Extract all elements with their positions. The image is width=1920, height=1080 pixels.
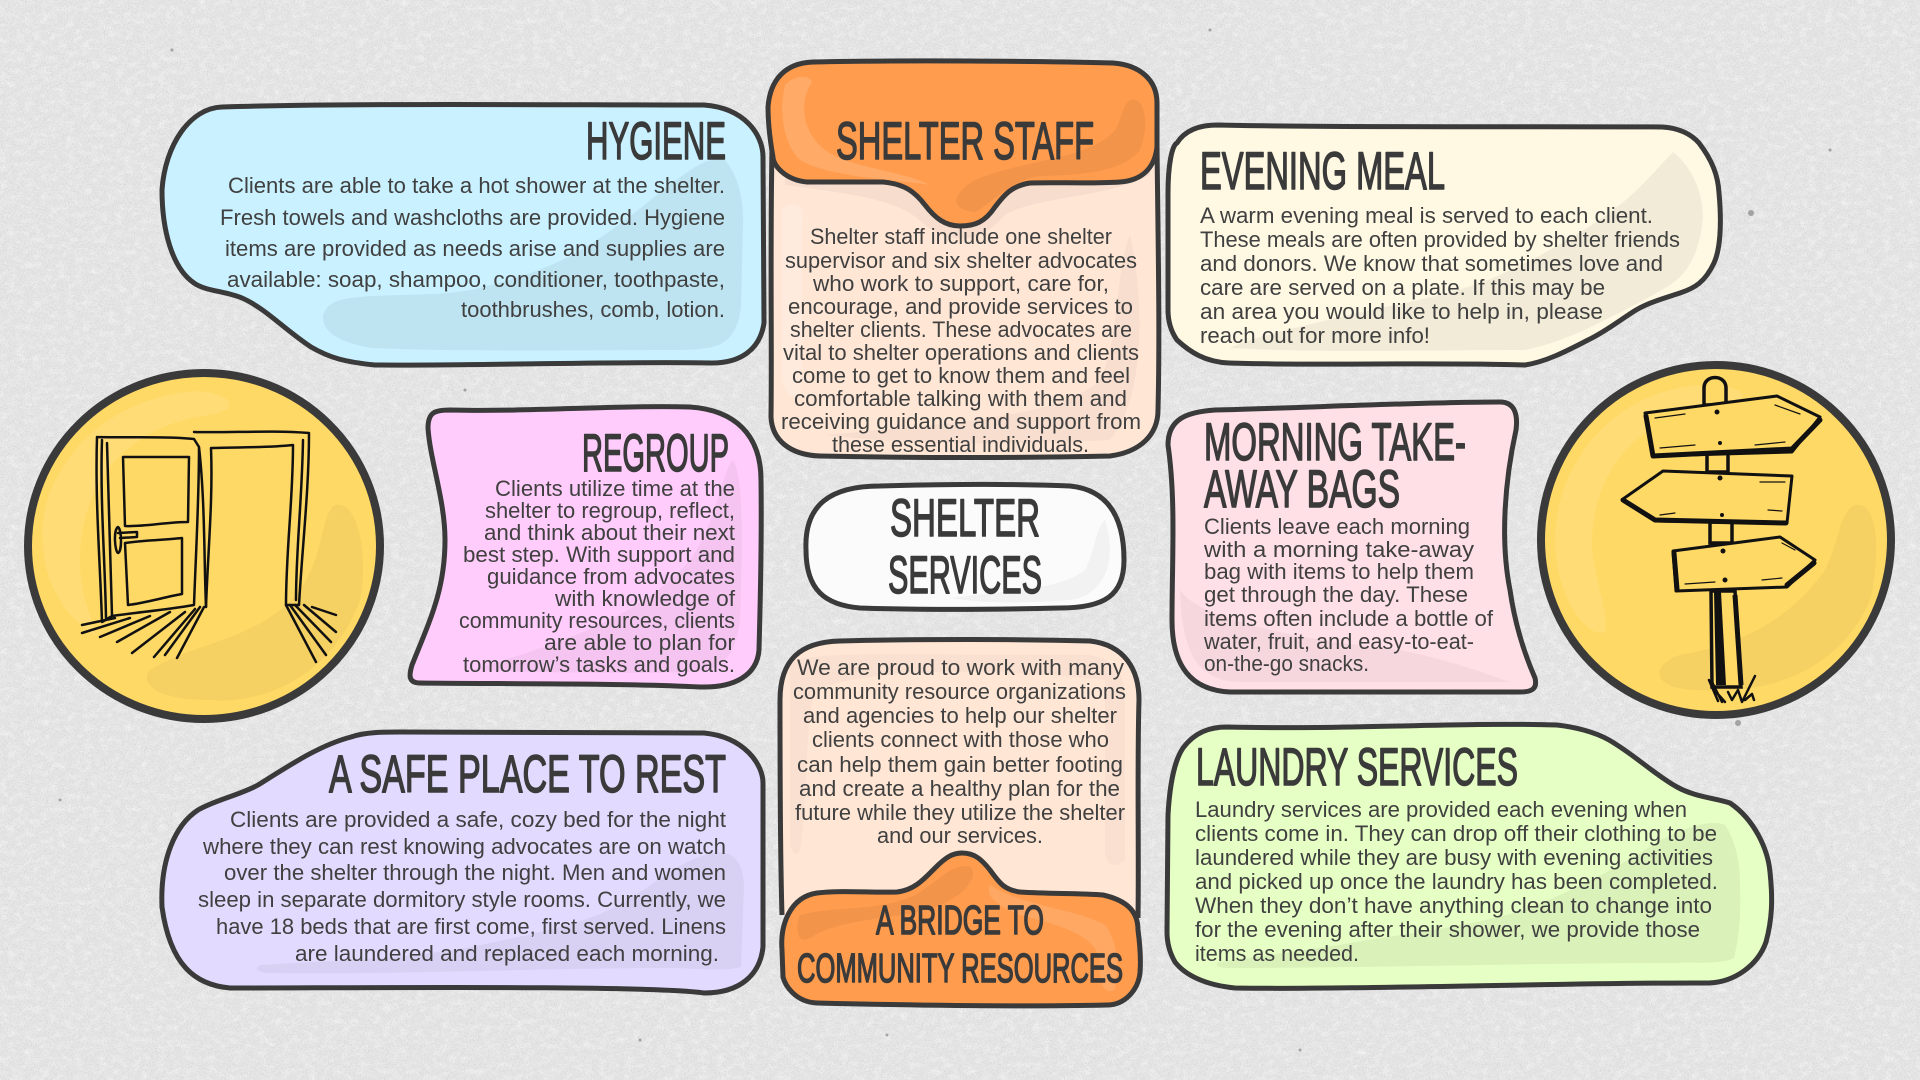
text: shelter staff description: these essential individuals. — [832, 432, 1089, 457]
text: shelter staff description: supervisor and six shelter advocates — [785, 248, 1137, 273]
shape: bridge orange footer — [782, 853, 1140, 1006]
heading: laundry services: LAUNDRY SERVICES — [1196, 738, 1518, 797]
text: laundry description: Laundry services are provided each evening when — [1195, 797, 1687, 822]
shape: staff orange header — [768, 61, 1157, 226]
text: hygiene description: available: soap, shampoo, conditioner, toothpaste, — [227, 267, 725, 292]
text: evening meal description: A warm evening meal is served to each client. — [1200, 203, 1653, 228]
text: bridge description: future while they utilize the shelter — [795, 800, 1125, 825]
heading: morning take-away bags: AWAY BAGS — [1204, 460, 1400, 519]
text: shelter staff description — [781, 224, 1141, 457]
text: safe place description: Clients are provided a safe, cozy bed for the night — [230, 807, 726, 832]
text: bridge description: can help them gain better footing — [797, 752, 1123, 777]
panel: shelter services title — [806, 484, 1124, 610]
text: shelter staff description: vital to shelter operations and clients — [783, 340, 1139, 365]
heading: evening meal: EVENING MEAL — [1200, 142, 1445, 201]
text: shelter staff description: shelter clients. These advocates are — [790, 317, 1132, 342]
heading: shelter: SHELTER — [890, 489, 1040, 548]
panel: laundry services — [1167, 724, 1772, 988]
heading: a bridge to community resources: A BRIDGE TO — [876, 897, 1044, 943]
text: regroup description: guidance from advocates — [487, 564, 735, 589]
text: evening meal description: reach out for more info! — [1200, 323, 1430, 348]
text: morning bags description: items often include a bottle of — [1204, 606, 1494, 631]
text: safe place description — [198, 807, 726, 966]
text: evening meal description: care are served on a plate. If this may be — [1200, 275, 1605, 300]
text: hygiene description: Clients are able to take a hot shower at the shelter. — [228, 173, 725, 198]
text: regroup description: are able to plan for — [544, 630, 735, 655]
text: bridge description: and create a healthy plan for the — [799, 776, 1120, 801]
text: morning bags description: water, fruit, and easy-to-eat- — [1203, 629, 1474, 654]
icon: open door circle — [28, 373, 380, 719]
heading: regroup: REGROUP — [582, 424, 729, 483]
text: shelter staff description: comfortable talking with them and — [794, 386, 1127, 411]
text: regroup description: shelter to regroup, reflect, — [485, 498, 735, 523]
text: safe place description: have 18 beds that are first come, first served. Linens — [216, 914, 726, 939]
heading: a safe place to rest: A SAFE PLACE TO REST — [329, 745, 726, 804]
heading: a bridge to community resources — [797, 897, 1123, 991]
text: safe place description: where they can rest knowing advocates are on watch — [202, 834, 726, 859]
heading: services: SERVICES — [888, 546, 1042, 605]
heading: hygiene: HYGIENE — [586, 112, 726, 171]
text: regroup description: community resources, clients — [459, 608, 735, 633]
text: regroup description: with knowledge of — [554, 586, 736, 611]
text: bridge description: community resource organizations — [793, 679, 1126, 704]
text: safe place description: sleep in separate dormitory style rooms. Currently, we — [198, 887, 726, 912]
door frame — [194, 432, 309, 607]
text: evening meal description: These meals are often provided by shelter friends — [1200, 227, 1680, 252]
sign: middle arrow left — [1623, 471, 1792, 523]
text: hygiene description: Fresh towels and washcloths are provided. Hygiene — [220, 205, 725, 230]
signpost pole — [1704, 378, 1741, 687]
heading: morning take-away bags — [1204, 413, 1466, 519]
text: evening meal description: an area you would like to help in, please — [1200, 299, 1603, 324]
text: morning bags description — [1203, 514, 1494, 676]
shape: staff body — [771, 145, 1159, 458]
text: regroup description: best step. With support and — [463, 542, 735, 567]
text: regroup description: tomorrow’s tasks and goals. — [463, 652, 735, 677]
shape: bridge body — [780, 640, 1139, 918]
text: laundry description: clients come in. They can drop off their clothing to be — [1195, 821, 1717, 846]
text: bridge description: We are proud to work with many — [797, 655, 1124, 680]
text: evening meal description: and donors. We know that sometimes love and — [1200, 251, 1663, 276]
text: bridge description — [793, 655, 1126, 848]
panel: a bridge to community resources — [780, 640, 1140, 1006]
text: bridge description: and agencies to help our shelter — [803, 703, 1117, 728]
text: hygiene description: toothbrushes, comb, lotion. — [461, 297, 725, 322]
text: shelter staff description: Shelter staff include one shelter — [810, 224, 1112, 249]
text: morning bags description: get through the day. These — [1204, 582, 1468, 607]
sign: lower arrow right — [1673, 537, 1815, 591]
text: laundry description: for the evening after their shower, we provide those — [1195, 917, 1700, 942]
text: regroup description — [459, 476, 736, 677]
text: hygiene description: items are provided as needs arise and supplies are — [225, 236, 725, 261]
icon: signpost circle — [1541, 365, 1891, 715]
text: safe place description: over the shelter through the night. Men and women — [224, 860, 726, 885]
text: morning bags description: with a morning take-away — [1203, 537, 1474, 562]
door leaf — [97, 437, 206, 622]
text: shelter staff description: come to get to know them and feel — [792, 363, 1130, 388]
text: laundry description: When they don’t have anything clean to change into — [1195, 893, 1712, 918]
panel: a safe place to rest — [162, 732, 763, 993]
text: morning bags description: Clients leave each morning — [1204, 514, 1470, 539]
sign: upper arrow right — [1645, 396, 1820, 456]
panel: regroup — [410, 407, 761, 687]
text: evening meal description — [1200, 203, 1680, 348]
text: safe place description: are laundered and replaced each morning. — [295, 941, 719, 966]
text: regroup description: Clients utilize time at the — [495, 476, 735, 501]
text: morning bags description: bag with items to help them — [1204, 559, 1474, 584]
panel: morning take-away bags — [1168, 402, 1536, 692]
text: regroup description: and think about their next — [484, 520, 735, 545]
door handle — [115, 527, 137, 553]
text: shelter staff description: encourage, and provide services to — [788, 294, 1133, 319]
grass — [1709, 676, 1755, 702]
text: bridge description: clients connect with those who — [812, 727, 1109, 752]
panel: hygiene — [162, 104, 764, 365]
text: laundry description: and picked up once the laundry has been completed. — [1195, 869, 1718, 894]
heading: morning take-away bags: MORNING TAKE- — [1204, 413, 1466, 472]
text: bridge description: and our services. — [877, 823, 1043, 848]
text: laundry description: laundered while they are busy with evening activities — [1195, 845, 1713, 870]
text: laundry description: items as needed. — [1195, 941, 1359, 966]
heading: shelter staff: SHELTER STAFF — [836, 112, 1094, 171]
text: hygiene description — [220, 173, 725, 322]
text: morning bags description: on-the-go snacks. — [1204, 651, 1369, 676]
heading: a bridge to community resources: COMMUNITY RESOURCES — [797, 945, 1123, 991]
text: shelter staff description: who work to support, care for, — [812, 271, 1109, 296]
door panels — [123, 457, 189, 605]
floor rays — [82, 605, 336, 662]
text: laundry description — [1195, 797, 1718, 966]
text: shelter staff description: receiving guidance and support from — [781, 409, 1141, 434]
panel: evening meal — [1168, 125, 1720, 365]
panel: shelter staff — [768, 61, 1159, 458]
